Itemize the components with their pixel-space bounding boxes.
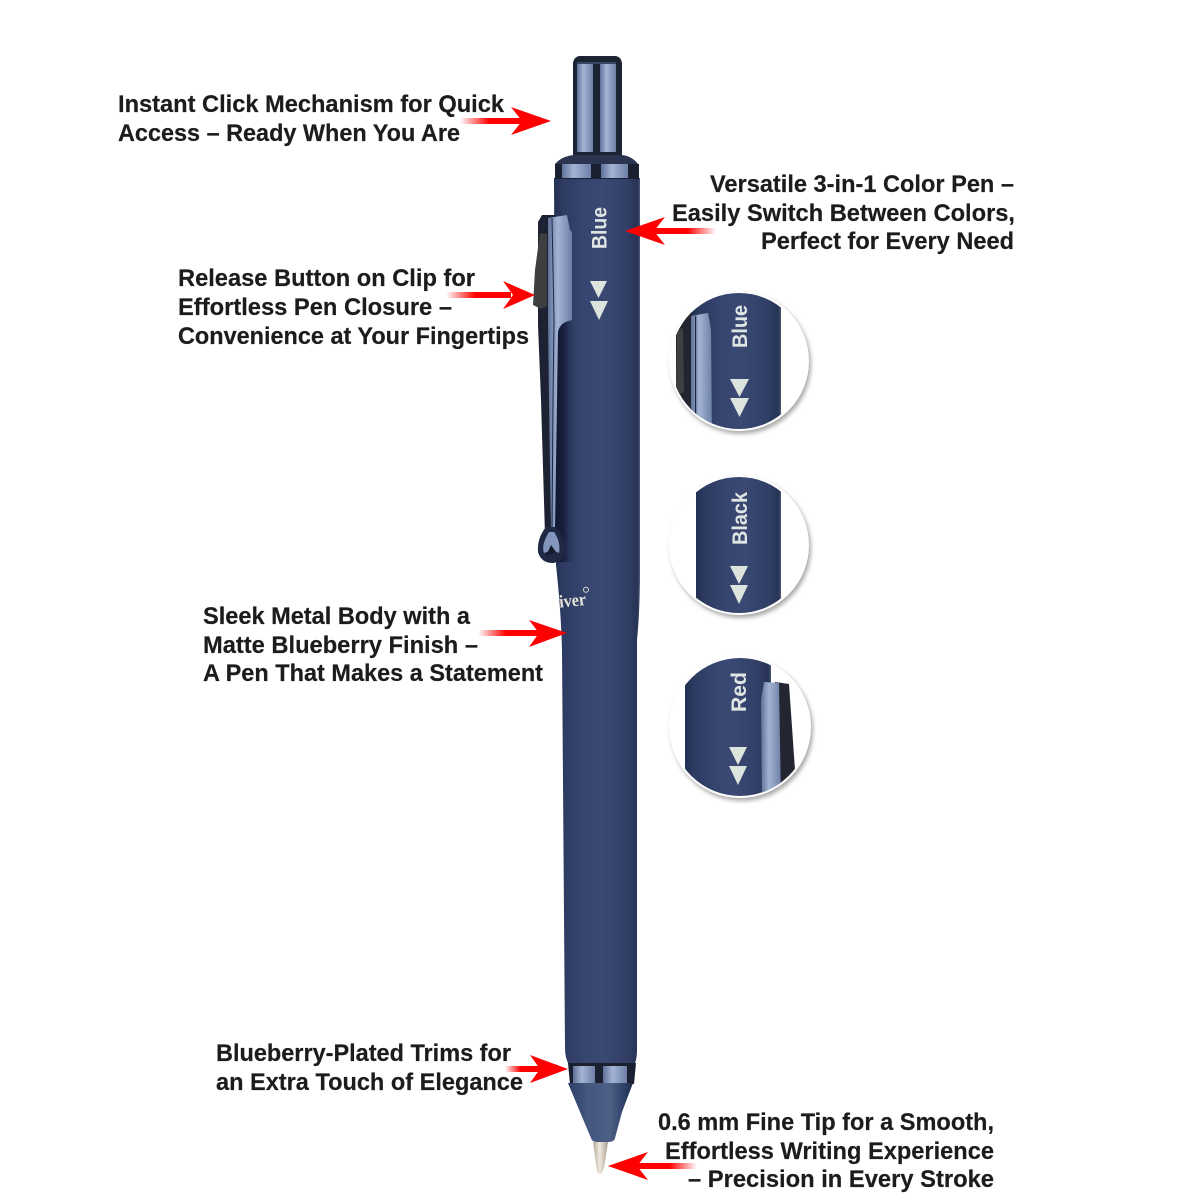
pen: tapered nose cone: [568, 1083, 633, 1142]
callout: fine tip: – Precision in Every Stroke: [688, 1166, 994, 1193]
callout: blueberry-plated trims: [216, 1040, 523, 1096]
circle 2: Black label: Black: [729, 492, 752, 545]
arrow: to writing tip: [608, 1152, 697, 1180]
arrow: to pen body: [478, 620, 567, 647]
pen: clip release button: [533, 233, 547, 309]
circle 1: Blue label: Blue: [729, 305, 752, 348]
callout: blueberry-plated trims: an Extra Touch of Elegance: [216, 1069, 523, 1096]
circle 2: pen barrel: [696, 470, 781, 620]
callout: blueberry-plated trims: Blueberry-Plated Trims for: [216, 1040, 511, 1067]
callout: versatile 3-in-1 color pen: [672, 171, 1015, 255]
arrow: to trim band: [505, 1055, 568, 1083]
callout: release button on clip: Effortless Pen Closure –: [178, 294, 452, 321]
circle 3: clip: [761, 682, 795, 800]
callout: sleek metal body: Matte Blueberry Finish –: [203, 632, 478, 659]
circle 1: twist arrows: [730, 379, 749, 417]
pen: twist arrows: [590, 281, 608, 320]
callout: instant click mechanism: Access – Ready When You Are: [118, 120, 460, 147]
callout: fine tip: 0.6 mm Fine Tip for a Smooth,: [658, 1109, 994, 1136]
callout: sleek metal body: A Pen That Makes a Statement: [203, 660, 543, 687]
pen: collar: [555, 155, 639, 179]
circle 2: twist arrows: [730, 566, 748, 604]
pen: clip ball end: [538, 527, 565, 563]
pen: clip shadow: [555, 322, 575, 562]
arrow: to release button: [446, 281, 535, 309]
callout: versatile 3-in-1 color pen: Easily Switch Between Colors,: [672, 200, 1015, 227]
circle 1: clip: [676, 312, 712, 424]
callout: sleek metal body: [203, 603, 543, 687]
pen: clip: [538, 215, 572, 535]
circle 3: twist arrows: [729, 747, 747, 785]
pen: writing tip: [593, 1142, 608, 1174]
detail circle: Black position: [669, 470, 811, 620]
callout: instant click mechanism: [118, 91, 505, 147]
callout: instant click mechanism: Instant Click Mechanism for Quick: [118, 91, 505, 118]
circle 1: pen barrel: [690, 293, 781, 429]
callout: fine tip: Effortless Writing Experience: [665, 1138, 994, 1165]
circle 3: pen barrel: [685, 658, 771, 796]
pen: lower trim band: [568, 1063, 636, 1084]
callout: release button on clip: Release Button on Clip for: [178, 265, 475, 292]
pen: [533, 56, 640, 1174]
detail circle: Blue position: [669, 280, 811, 440]
arrow: to color label: [625, 217, 716, 245]
arrow: to push button: [460, 107, 551, 135]
callout: versatile 3-in-1 color pen: Perfect for Every Need: [761, 228, 1014, 255]
callout: fine tip: [658, 1109, 994, 1193]
pen: push button: [573, 56, 622, 156]
callout: release button on clip: [178, 265, 529, 350]
pen: brand logo: iver: [558, 589, 587, 612]
callout: release button on clip: Convenience at Your Fingertips: [178, 323, 529, 350]
pen: barrel: [554, 178, 640, 1065]
circle 3: Red label: Red: [728, 672, 751, 712]
callout: versatile 3-in-1 color pen: Versatile 3-in-1 Color Pen –: [710, 171, 1014, 198]
callout: sleek metal body: Sleek Metal Body with a: [203, 603, 471, 630]
pen: Blue label: Blue: [588, 207, 612, 249]
detail circle: Red position: [669, 650, 813, 810]
